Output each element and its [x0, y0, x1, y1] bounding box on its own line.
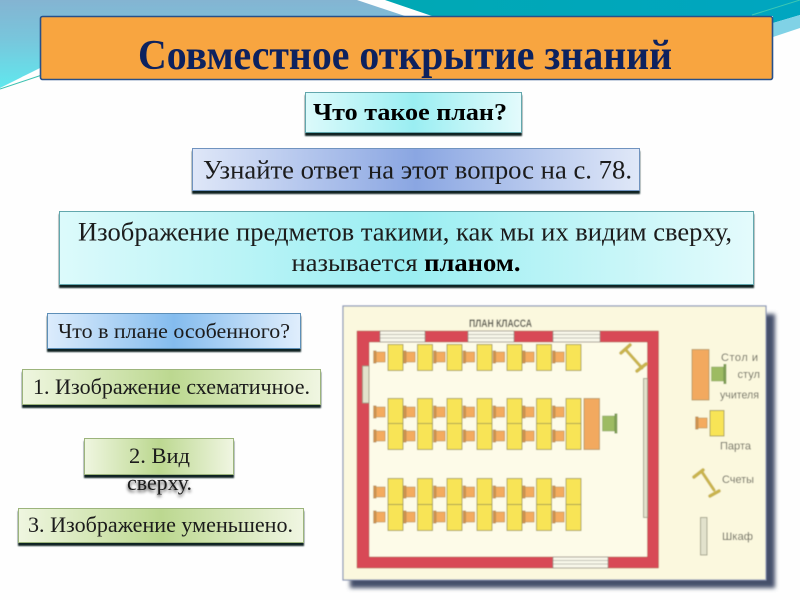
abacus in room — [621, 345, 646, 371]
answer 1: 1. Изображение схематичное. — [33, 374, 310, 399]
panel: classroom plan image — [343, 306, 775, 588]
legend: cabinet — [700, 518, 753, 555]
plan heading: ПЛАН КЛАССА — [469, 318, 532, 330]
question box: what is special — [48, 314, 300, 348]
question box: what is a plan — [306, 92, 522, 132]
answer 2: 2. Вид — [129, 443, 190, 468]
title bar: Совместное открытие знаний — [138, 33, 672, 79]
legend: teacher desk and chair — [692, 350, 760, 402]
background swoosh: top banner — [0, 0, 800, 89]
instruction box: page reference: Узнайте ответ на этот вопрос на с. 78. — [203, 156, 632, 184]
answer 2: сверху. — [127, 470, 192, 495]
legend: teacher desk and chair: Стол и — [721, 352, 758, 364]
legend: cabinet: Шкаф — [722, 531, 753, 543]
student chairs — [374, 351, 564, 523]
legend — [692, 350, 760, 555]
answer 2 — [84, 438, 234, 495]
teacher desk and chair — [584, 398, 617, 450]
instruction box: page reference — [192, 148, 640, 190]
legend: student desk: Парта — [720, 440, 752, 452]
question box: what is a plan: Что такое план? — [313, 100, 507, 126]
answer 3: 3. Изображение уменьшено. — [28, 512, 293, 537]
definition box — [60, 212, 754, 284]
legend: teacher desk and chair: стул — [738, 369, 760, 381]
answer 3 — [18, 508, 304, 542]
definition box: называется планом. — [292, 250, 520, 277]
cabinets in room — [362, 366, 648, 518]
legend: teacher desk and chair: учителя — [720, 390, 759, 402]
definition box: Изображение предметов такими, как мы их видим сверху, — [78, 218, 732, 246]
student desks — [388, 344, 581, 530]
legend: abacus: Счеты — [722, 474, 754, 486]
answer 1 — [22, 370, 320, 404]
legend: abacus — [694, 470, 754, 496]
question box: what is special: Что в плане особенного? — [58, 319, 290, 343]
classroom walls — [357, 331, 658, 568]
title bar — [40, 16, 772, 80]
legend: student desk — [696, 410, 752, 452]
